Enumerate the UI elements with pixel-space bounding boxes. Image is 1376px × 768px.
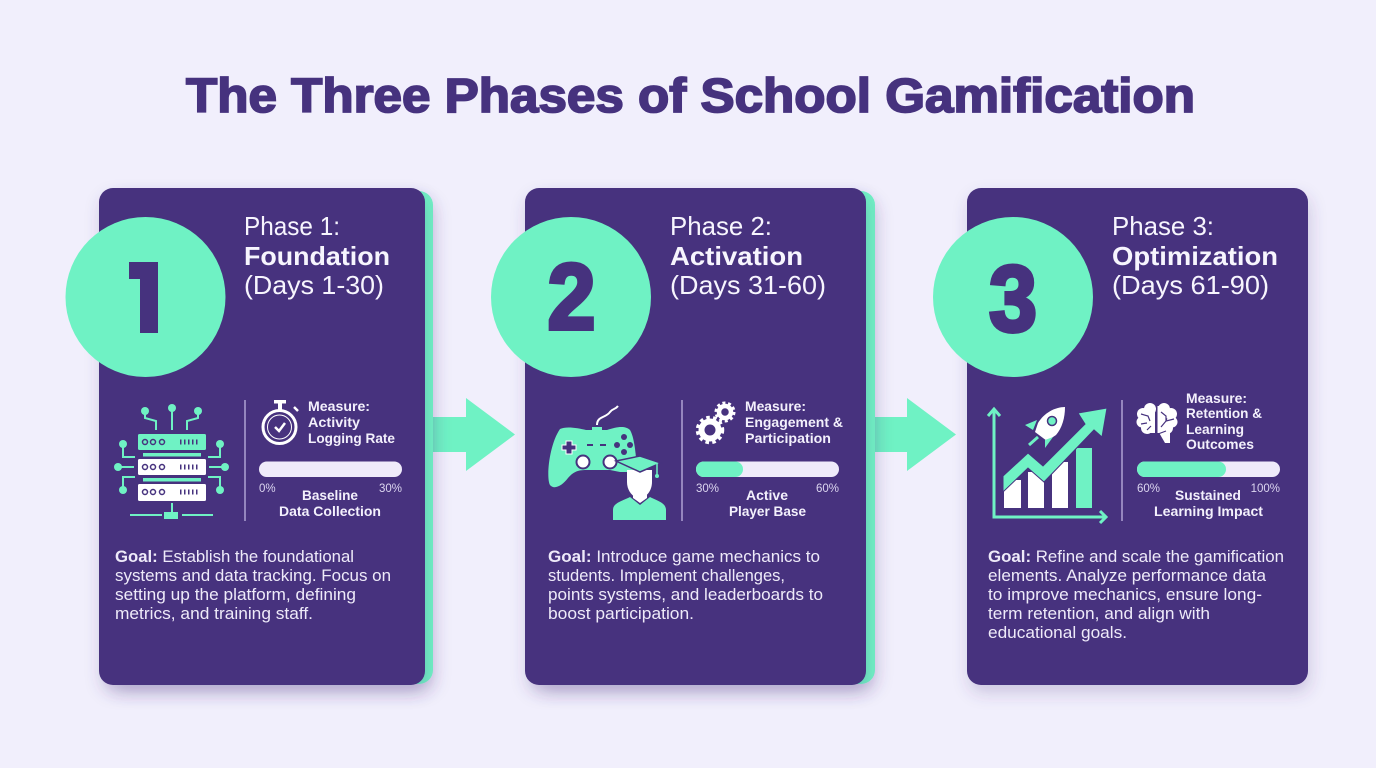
card backing accent [110,191,433,684]
goal text: to improve mechanics, ensure long- [988,586,1262,604]
panel: phase 1 [66,188,433,685]
measure label: Outcomes [1186,437,1254,452]
measure label [308,399,395,446]
goal text: metrics, and training staff. [115,605,313,623]
progress caption: Data Collection [279,504,381,519]
phase heading: Activation [670,241,803,271]
panel: phase 3 [933,188,1308,685]
goal text: systems and data tracking. Focus on [115,567,391,585]
goal text: boost participation. [548,605,694,623]
card backing accent [536,191,875,684]
progress caption [279,488,381,519]
progress caption: Learning Impact [1154,504,1263,519]
icon: gears [698,403,734,442]
measure label [745,399,843,446]
number badge 1: 1 [113,234,173,357]
progress caption [1154,488,1263,519]
measure label: Engagement & [745,415,843,430]
phase heading [670,211,826,300]
progress bar: 60 to 100 percent [1137,462,1280,495]
progress bar: 30 to 60 percent [696,462,839,495]
number badge 3: 3 [989,246,1037,351]
measure label: Activity [308,415,360,430]
number badge 2 [491,217,651,377]
phase heading: Optimization [1112,241,1278,271]
number badge 3 [933,217,1093,377]
progress caption: Player Base [729,504,806,519]
measure label: Retention & [1186,406,1262,421]
progress bar: 0 to 30 percent [259,462,402,495]
progress caption [729,488,806,519]
icon: server network [114,404,229,519]
phase heading: Phase 1: [244,211,340,241]
measure label: Measure: [308,399,370,414]
measure label: Logging Rate [308,431,395,446]
progress bar: 0 to 30 percent: 30% [379,483,402,495]
panel: phase 2 [491,188,875,685]
goal text: educational goals. [988,624,1127,642]
progress caption: Sustained [1175,488,1241,503]
goal text: points systems, and leaderboards to [548,586,823,604]
goal text: elements. Analyze performance data [988,567,1266,585]
goal text [115,548,391,623]
progress bar: 30 to 60 percent: 60% [816,483,839,495]
progress bar: 0 to 30 percent: 0% [259,483,276,495]
phase heading: (Days 1-30) [244,270,384,300]
progress bar: 30 to 60 percent: 30% [696,483,719,495]
divider [1121,400,1123,521]
divider [244,400,246,521]
number badge 2: 2 [548,244,596,349]
icon: brain [1136,403,1178,443]
phase heading: Foundation [244,241,390,271]
divider [681,400,683,521]
number badge 1 [66,217,226,377]
phase heading [1112,211,1278,300]
goal text [548,548,823,623]
card body [967,188,1308,685]
phase heading: (Days 61-90) [1112,270,1269,300]
card body [99,188,425,685]
phase heading [244,211,390,300]
arrow: phase 2 to phase 3 [870,398,956,471]
card body [525,188,866,685]
goal text: Goal: Refine and scale the gamification [988,548,1284,566]
measure label: Learning [1186,422,1244,437]
goal text [988,548,1284,642]
progress caption: Baseline [302,488,358,503]
icon: growth chart with rocket [988,407,1107,523]
phase heading: Phase 2: [670,211,772,241]
goal text: Goal: Introduce game mechanics to [548,548,820,566]
icon: stopwatch [263,400,298,444]
measure label: Participation [745,431,831,446]
icon: game controller and student [548,406,666,520]
measure label [1186,391,1262,452]
arrow: phase 1 to phase 2 [430,398,515,471]
progress caption: Active [746,488,788,503]
phase heading: (Days 31-60) [670,270,826,300]
phase heading: Phase 3: [1112,211,1214,241]
goal text: students. Implement challenges, [548,567,785,585]
goal text: term retention, and align with [988,605,1210,623]
progress bar: 60 to 100 percent: 100% [1251,483,1280,495]
progress bar: 60 to 100 percent: 60% [1137,483,1160,495]
goal text: setting up the platform, defining [115,586,356,604]
goal text: Goal: Establish the foundational [115,548,354,566]
measure label: Measure: [1186,391,1247,406]
measure label: Measure: [745,399,806,414]
title: The Three Phases of School Gamification [186,70,1195,123]
